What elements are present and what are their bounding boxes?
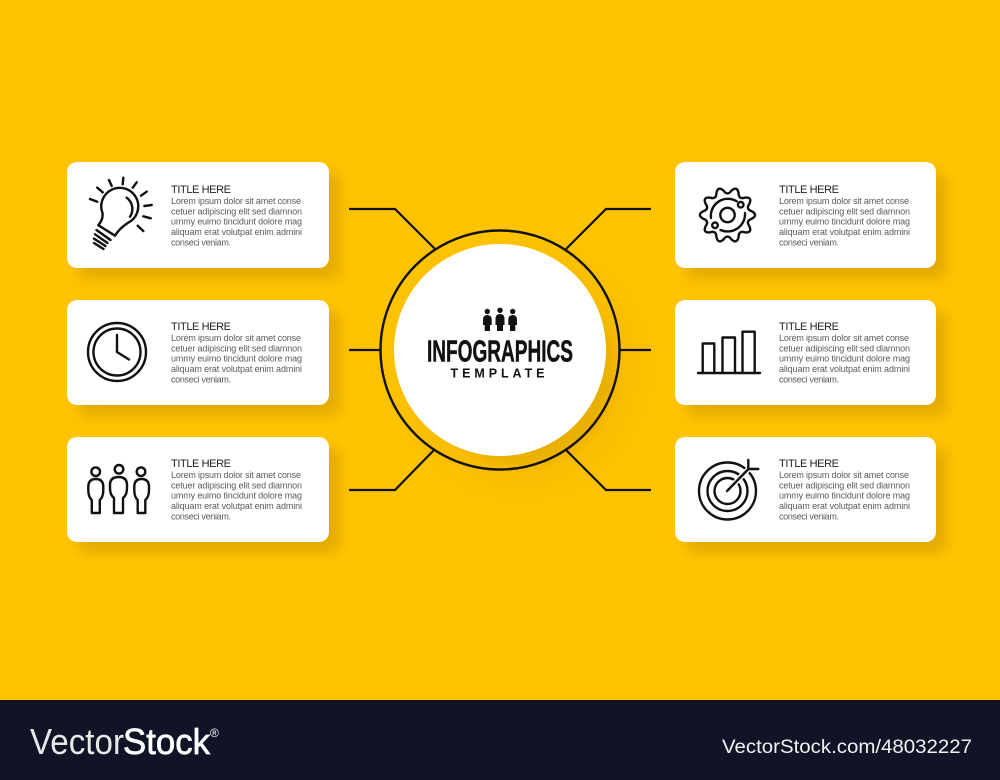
body text: aliquam erat volutpat enim admini [171,227,302,237]
connector lines [349,209,651,490]
card 5: chart [675,300,947,416]
subheading: template: TEMPLATE [450,366,544,380]
body text [779,196,910,247]
body text: Lorem ipsum dolor sit amet conse [171,470,301,480]
body text [171,196,302,247]
card panel [675,162,936,268]
body text: Lorem ipsum dolor sit amet conse [779,333,909,343]
card 6: target [675,437,947,553]
body text [171,470,302,521]
card 1: idea [67,162,340,279]
footer band [0,700,1000,780]
body text: aliquam erat volutpat enim admini [171,364,302,374]
circle shadow [378,228,662,512]
body text: ummy euimo tincidunt dolore mag [779,354,910,364]
body text: cetuer adipiscing elit sed diamnon [171,343,302,353]
card panel [675,437,936,542]
footer logo: Vector [30,721,124,762]
body text: Lorem ipsum dolor sit amet conse [779,196,909,206]
card shadow [686,173,947,279]
body text: ummy euimo tincidunt dolore mag [779,217,910,227]
body text: Lorem ipsum dolor sit amet conse [779,470,909,480]
card shadow [686,448,947,553]
outer ring [380,230,620,470]
icon: clock [88,323,146,381]
body text: Lorem ipsum dolor sit amet conse [171,196,301,206]
icon: bar chart [698,332,760,373]
body text: cetuer adipiscing elit sed diamnon [171,480,302,490]
card 4: settings [675,162,947,279]
card shadow [78,448,340,553]
central circle [380,230,620,470]
title: TITLE HERE [779,458,839,470]
card panel [67,300,329,405]
footer logo: Stock [123,721,211,762]
body text: conseci veniam. [779,237,839,247]
card shadow [686,311,947,416]
body text: ummy euimo tincidunt dolore mag [171,491,302,501]
footer image id: VectorStock.com/48032227 [722,736,972,758]
body text [779,333,910,384]
body text: Lorem ipsum dolor sit amet conse [171,333,301,343]
title: TITLE HERE [779,184,839,196]
body text: conseci veniam. [171,511,231,521]
body text [779,470,910,521]
card shadow [78,311,340,416]
title: TITLE HERE [779,321,839,333]
registered mark: ® [210,726,219,740]
body text: aliquam erat volutpat enim admini [779,227,910,237]
icon: light bulb [90,178,152,249]
body text: ummy euimo tincidunt dolore mag [779,491,910,501]
title: TITLE HERE [171,458,231,470]
body text: cetuer adipiscing elit sed diamnon [779,343,910,353]
body text: conseci veniam. [779,511,839,521]
card panel [67,162,329,268]
card panel [675,300,936,405]
body text: aliquam erat volutpat enim admini [779,364,910,374]
body text: cetuer adipiscing elit sed diamnon [171,206,302,216]
card 3: team [67,437,340,553]
heading: infographics: INFOGRAPHICS [427,334,573,369]
footer logo [30,721,211,762]
body text: cetuer adipiscing elit sed diamnon [779,206,910,216]
icon: target [699,460,758,520]
body text: ummy euimo tincidunt dolore mag [171,354,302,364]
body text: aliquam erat volutpat enim admini [779,501,910,511]
title: TITLE HERE [171,184,231,196]
icon: gear [700,189,755,241]
body text: conseci veniam. [171,374,231,384]
body text: cetuer adipiscing elit sed diamnon [779,480,910,490]
body text [171,333,302,384]
title: TITLE HERE [171,321,231,333]
white disc [394,244,606,456]
body text: conseci veniam. [171,237,231,247]
card shadow [78,173,340,279]
body text: conseci veniam. [779,374,839,384]
icon: people outlines [88,465,149,513]
body text: aliquam erat volutpat enim admini [171,501,302,511]
card panel [67,437,329,542]
card 2: time [67,300,340,416]
icon: three people [483,308,517,331]
body text: ummy euimo tincidunt dolore mag [171,217,302,227]
